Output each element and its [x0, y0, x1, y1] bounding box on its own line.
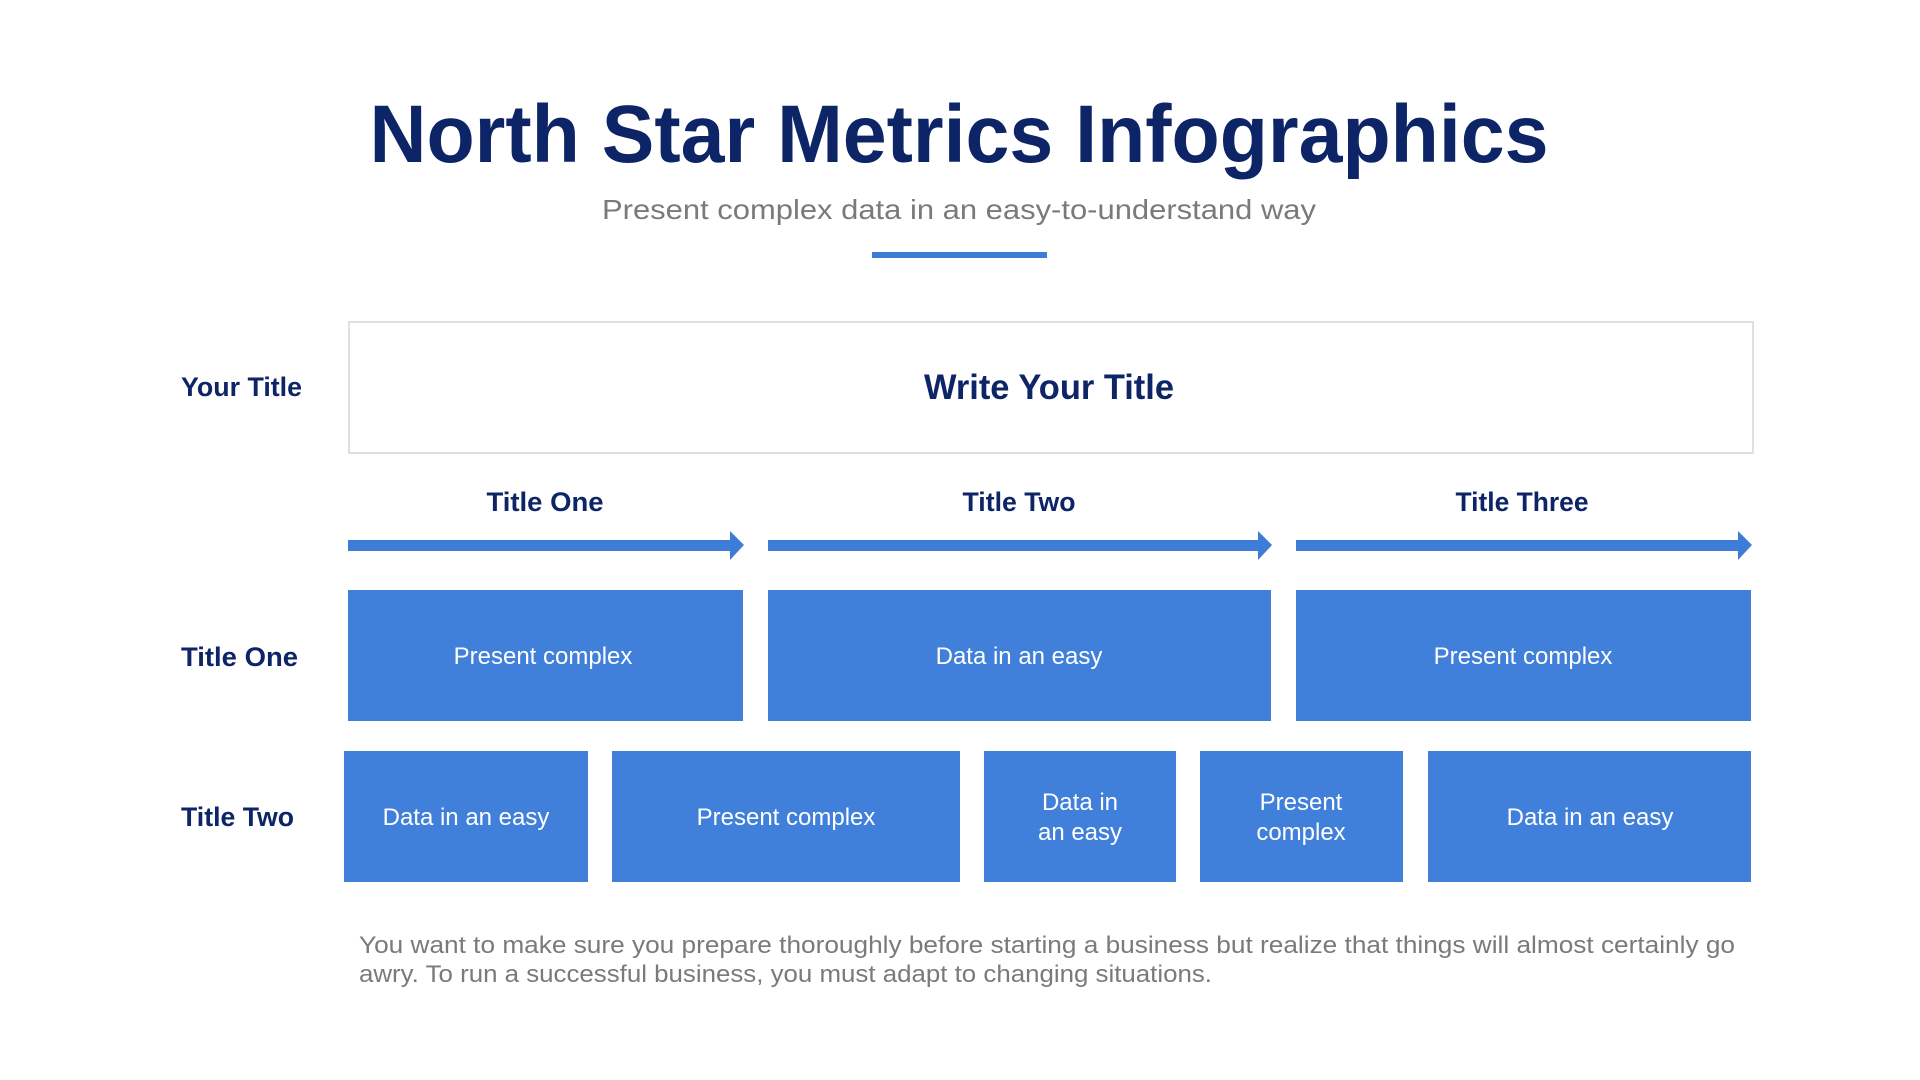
text: Data in an easy: [936, 643, 1102, 670]
text: complex: [1256, 819, 1346, 846]
text: Data in: [1042, 789, 1118, 816]
subtitle: Present complex data in an easy-to-understand way: [602, 194, 1316, 225]
text: Data in an easy: [383, 804, 549, 831]
footer text: [359, 932, 1735, 988]
text: Present complex: [454, 643, 632, 670]
text: Present complex: [1434, 643, 1612, 670]
text: Data in an easy: [1507, 804, 1673, 831]
column titles: [486, 487, 1588, 517]
footer text: awry. To run a successful business, you must adapt to changing situations.: [359, 961, 1212, 988]
header box: [349, 322, 1753, 453]
arrows: [348, 531, 1752, 560]
column titles: Title One: [486, 487, 604, 517]
text: Present complex: [697, 804, 875, 831]
text: Present: [1260, 789, 1343, 816]
footer text: You want to make sure you prepare thoroughly before starting a business but realize that things will almost certainly go: [359, 932, 1735, 959]
column titles: Title Two: [962, 487, 1076, 517]
text: an easy: [1038, 819, 1122, 846]
title: North Star Metrics Infographics: [370, 89, 1548, 180]
row label: title two: Title Two: [181, 802, 294, 832]
row 2 boxes: [344, 751, 1751, 882]
row label: your title: Your Title: [181, 372, 302, 402]
header box: Write Your Title: [924, 368, 1174, 407]
column titles: Title Three: [1456, 487, 1588, 517]
row 1 boxes: [348, 590, 1751, 721]
row label: title one: Title One: [181, 642, 298, 672]
